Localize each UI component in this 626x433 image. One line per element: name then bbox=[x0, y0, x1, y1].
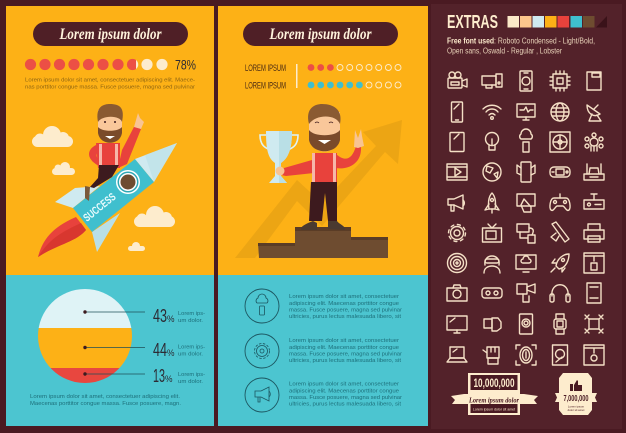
icon: smart watch bbox=[554, 314, 566, 334]
icon: fingerprint phone bbox=[520, 314, 532, 334]
feature row 2: adipiscing elit. Maecenas porttitor congue bbox=[289, 345, 399, 351]
feature row 1: ultricies, purus lectus malesuada libero, sit bbox=[289, 314, 401, 320]
feature row 3: ultricies, purus lectus malesuada libero, sit bbox=[289, 402, 401, 408]
feature row 2: Lorem ipsum dolor sit amet, consectetuer bbox=[289, 338, 399, 344]
pie labels: um dolor. bbox=[178, 379, 203, 385]
icon: molecule bbox=[585, 133, 603, 151]
feature row 2 bbox=[245, 334, 402, 368]
icon: smart glove hand bbox=[483, 347, 499, 364]
icon: gear bbox=[448, 224, 466, 242]
badge: 10,000,000 bbox=[451, 373, 538, 415]
heading pill left bbox=[33, 22, 188, 46]
panel: left top orange bbox=[6, 6, 214, 275]
font credits: Free font used: Roboto Condensed - Light/Bold, bbox=[447, 36, 595, 46]
panel: middle bottom teal bbox=[218, 275, 428, 426]
icon: controller box bbox=[584, 194, 604, 209]
icon: cloud phone bbox=[520, 129, 532, 152]
icon: hard drive bbox=[552, 345, 568, 365]
feature row 3: Lorem ipsum dolor sit amet, consectetuer bbox=[289, 382, 399, 388]
icon: satellite bbox=[551, 222, 569, 242]
icon: smartphone bbox=[452, 102, 462, 122]
text block left top bbox=[25, 78, 195, 90]
text block left top: nas porttitor congue massa. Fusce posuere, magna sed pulvinar bbox=[25, 84, 195, 90]
illustration: man with trophy bbox=[276, 104, 364, 230]
icon: photo camera bbox=[447, 285, 467, 301]
icon: devices bbox=[482, 74, 502, 88]
icon: satellite dish bbox=[587, 105, 601, 121]
pie labels: 43 bbox=[153, 306, 167, 326]
pie labels: 13 bbox=[153, 366, 165, 386]
pie labels: Lorem ips- bbox=[178, 311, 205, 317]
icon: handheld console bbox=[550, 167, 570, 177]
pie labels: Lorem ips- bbox=[178, 372, 205, 378]
icon: phone with globe bbox=[520, 71, 532, 91]
icon: wifi bbox=[483, 105, 501, 119]
text block left bottom bbox=[30, 394, 181, 407]
panel: middle top orange bbox=[218, 6, 428, 275]
background arrow bbox=[235, 120, 402, 258]
illustration: man on rocket bbox=[85, 104, 144, 201]
podium bbox=[258, 227, 388, 258]
feature row 2: ultricies, purus lectus malesuada libero, sit bbox=[289, 358, 401, 364]
icon: ssd bbox=[587, 283, 601, 303]
colour swatches bbox=[508, 16, 607, 28]
text block left top: Lorem ipsum dolor sit amet, consectetuer adipiscing elit. Maece- bbox=[25, 78, 195, 84]
icon: vr goggles bbox=[482, 288, 502, 298]
clouds bbox=[32, 126, 175, 251]
icon: tablet bbox=[450, 132, 464, 152]
pie labels: % bbox=[165, 374, 172, 384]
feature row 1: Lorem ipsum dolor sit amet, consectetuer bbox=[289, 294, 399, 300]
badge: 10,000,000: Lorem ipsum dolor bbox=[468, 396, 519, 404]
panel: left bottom teal bbox=[6, 275, 214, 426]
icon: router bbox=[584, 164, 604, 180]
trophy bbox=[260, 131, 298, 183]
badge: 10,000,000: Lorem ipsum dolor sit amet bbox=[473, 408, 515, 412]
feature row 2: massa. Fusce posuere, magna sed pulvinar bbox=[289, 352, 402, 358]
rating rows: LOREM IPSUM bbox=[245, 63, 286, 74]
text block left bottom: Maecenas porttitor congue massa. Fusce posuere, magn. bbox=[30, 401, 181, 407]
feature row 1: massa. Fusce posuere, magna sed pulvinar bbox=[289, 308, 402, 314]
icon: desktop monitor bbox=[447, 316, 467, 333]
heading pill left: Lorem ipsum dolor bbox=[59, 26, 162, 43]
font credits bbox=[447, 36, 595, 56]
rating rows: LOREM IPSUM bbox=[245, 80, 286, 92]
icon: tv bbox=[482, 224, 502, 242]
illustration: rocket bbox=[38, 143, 177, 257]
pie labels: um dolor. bbox=[178, 352, 203, 358]
pie chart bbox=[38, 289, 145, 384]
icon: target bbox=[448, 254, 466, 272]
icon grid bbox=[447, 71, 604, 365]
icon: video player bbox=[447, 164, 467, 180]
dot progress 78 percent: 78% bbox=[175, 56, 196, 72]
icon: 3d printing bbox=[584, 345, 604, 365]
font credits: Open sans, Oswald - Regular , Lobster bbox=[447, 46, 562, 56]
icon: gamepad bbox=[550, 194, 570, 210]
pie labels: 44 bbox=[153, 340, 167, 360]
icon: phone with wings bbox=[517, 162, 535, 182]
icon: megaphone bbox=[448, 195, 464, 211]
feature row 3 bbox=[245, 378, 402, 412]
rating rows bbox=[245, 63, 401, 92]
icon: earth bbox=[483, 163, 501, 181]
dot progress 78 percent bbox=[25, 56, 196, 72]
extras heading: EXTRAS bbox=[447, 12, 498, 32]
feature row 1: adipiscing elit. Maecenas porttitor congue bbox=[289, 301, 399, 307]
icon: monitor pulse bbox=[517, 104, 535, 120]
pie labels bbox=[153, 306, 205, 386]
icon: printer bbox=[584, 224, 604, 242]
icon: connected devices bbox=[517, 224, 535, 243]
text block left bottom: Lorem ipsum dolor sit amet, consectetuer adipiscing elit. bbox=[30, 394, 180, 400]
icon: rocket bbox=[485, 193, 499, 213]
icon: headphones bbox=[550, 285, 570, 302]
feature row 3: massa. Fusce posuere, magna sed pulvinar bbox=[289, 395, 402, 401]
icon: drone camera bbox=[517, 284, 535, 302]
icon: sim card bbox=[587, 72, 601, 90]
feature row 1 bbox=[245, 289, 402, 323]
icon: rocket diagonal bbox=[551, 254, 569, 272]
heading pill middle: Lorem ipsum dolor bbox=[269, 26, 372, 43]
icon: movie camera bbox=[448, 72, 467, 88]
icon: cloud monitor bbox=[516, 255, 536, 272]
icon: cpu bbox=[550, 71, 570, 91]
icon: touch screen bbox=[517, 194, 535, 212]
panel: extras bbox=[431, 4, 622, 429]
feature row 3: adipiscing elit. Maecenas porttitor congue bbox=[289, 388, 399, 394]
icon: fan bbox=[550, 132, 570, 152]
icon: vr head bbox=[484, 256, 500, 273]
badge: thumbs up: Lorem ipsum bbox=[568, 404, 585, 408]
badge: 10,000,000: 10,000,000 bbox=[474, 376, 515, 390]
pie labels: um dolor. bbox=[178, 318, 203, 324]
pie labels: % bbox=[167, 314, 174, 324]
icon: drone bbox=[585, 315, 603, 333]
icon: www globe bbox=[551, 103, 569, 121]
icon: laptop bbox=[447, 347, 467, 362]
icon: lightbulb bbox=[486, 132, 498, 150]
illustration: rocket: SUCCESS bbox=[81, 191, 118, 224]
badge: thumbs up: 7,000,000 bbox=[564, 394, 589, 403]
pie labels: % bbox=[167, 348, 174, 358]
icon: 3d printer bbox=[584, 253, 604, 273]
heading pill middle bbox=[243, 22, 398, 46]
pie labels: Lorem ips- bbox=[178, 344, 205, 350]
badge: thumbs up: dolor sit amet bbox=[568, 408, 585, 412]
icon: fingerprint scan bbox=[516, 345, 536, 365]
icon: smart glove bbox=[484, 318, 501, 331]
badge: thumbs up bbox=[555, 373, 597, 415]
